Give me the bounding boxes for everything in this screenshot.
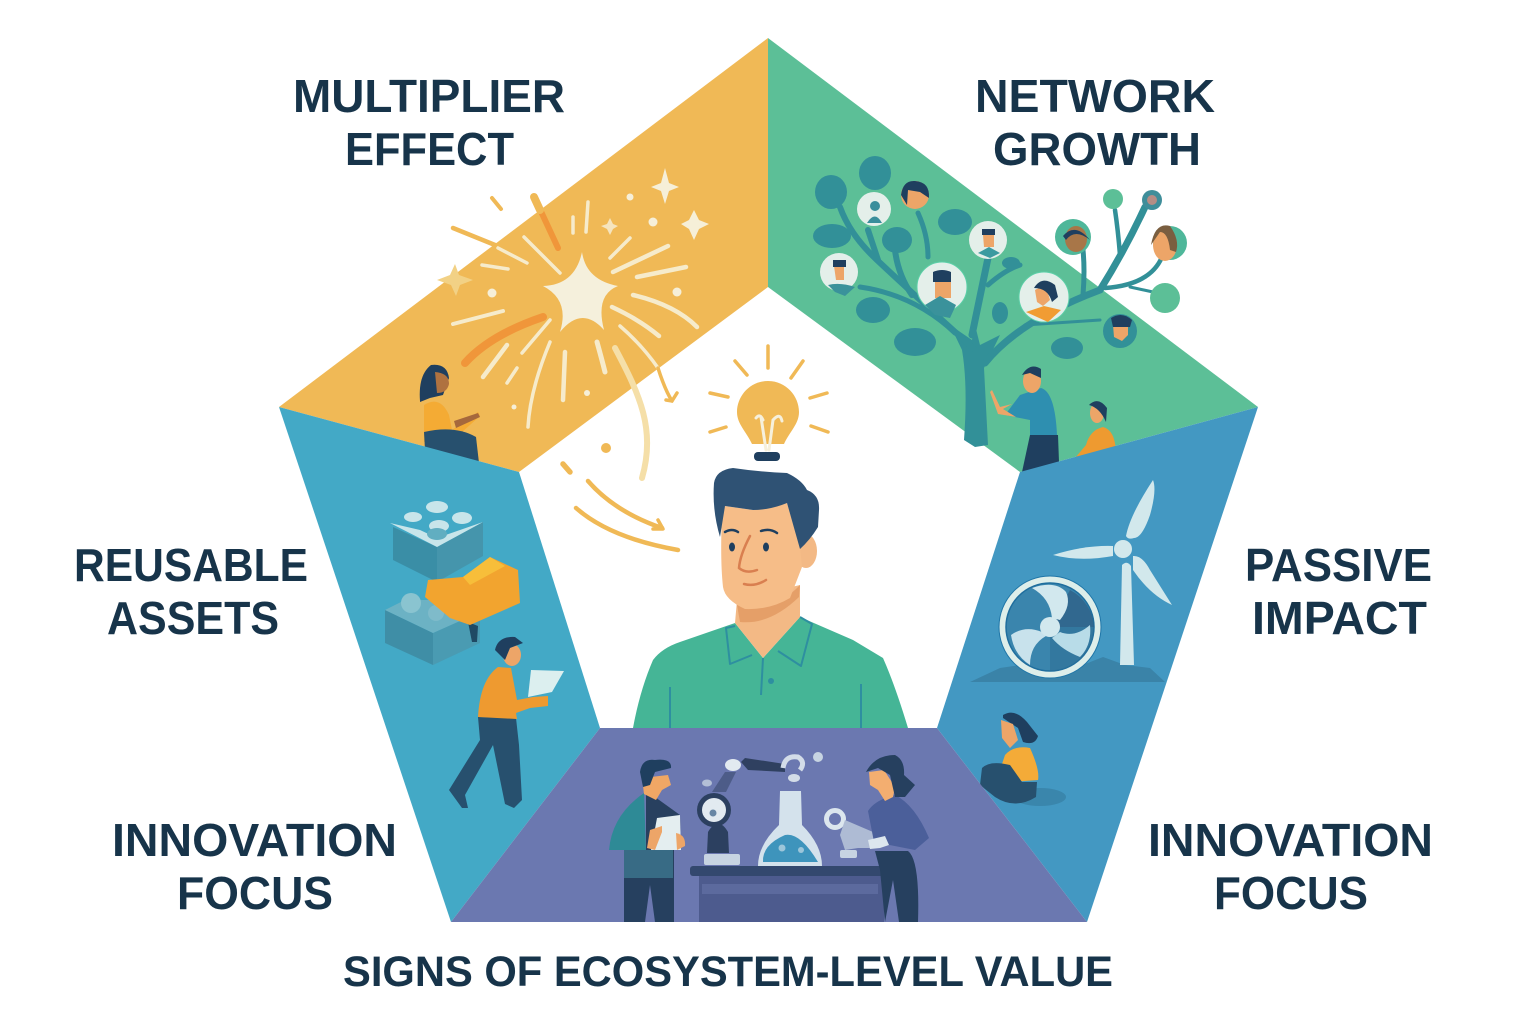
heading: reusable assets: ASSETS: [107, 592, 279, 644]
panel: multiplier effect: [279, 38, 768, 478]
icon: fireworks burst: [437, 168, 709, 478]
figure: man reading: [449, 637, 564, 808]
heading: multiplier effect: MULTIPLIER: [293, 70, 565, 122]
panel: network growth: [768, 38, 1258, 472]
icon: building blocks: [385, 501, 520, 665]
heading: innovation focus right: FOCUS: [1214, 867, 1368, 919]
nose and smile: [739, 536, 766, 585]
title: SIGNS OF ECOSYSTEM-LEVEL VALUE: [343, 948, 1113, 996]
heading: innovation focus right: INNOVATION: [1148, 814, 1433, 866]
panel: reusable assets teal: [279, 407, 600, 922]
heading: passive impact: PASSIVE: [1245, 539, 1432, 591]
heading: innovation focus left: INNOVATION: [112, 814, 397, 866]
heading: multiplier effect: EFFECT: [345, 123, 514, 175]
collar: [670, 617, 861, 728]
figure: man at tree: [990, 367, 1059, 472]
figure: woman at table: [866, 755, 929, 922]
icon: yellow swoosh arrows: [563, 443, 678, 550]
ear: [795, 534, 817, 568]
eyes and brows: [725, 530, 777, 552]
heading: passive impact: IMPACT: [1252, 592, 1427, 644]
heading: passive impact: [1245, 539, 1432, 644]
figure: child in orange: [1075, 401, 1116, 458]
icon: tree of people: [813, 156, 1187, 447]
panel: passive impact: [937, 407, 1258, 922]
portrait circles: [820, 181, 1187, 348]
heading: network growth: [975, 70, 1215, 175]
icon: fan: [999, 576, 1101, 678]
icon: flask: [758, 791, 822, 866]
man: central figure: [633, 468, 908, 728]
shirt: [633, 617, 908, 728]
icon: light bulb: [710, 346, 828, 461]
hair: [714, 468, 819, 549]
icon: robot arm: [697, 752, 880, 865]
figure: sitting woman: [980, 713, 1066, 806]
heading: network growth: GROWTH: [993, 123, 1201, 175]
heading: innovation focus left: [112, 814, 397, 919]
icon: lab table: [690, 866, 887, 922]
heading: network growth: NETWORK: [975, 70, 1215, 122]
face: [721, 503, 802, 609]
figure: seated woman: [420, 365, 480, 463]
figure: man with tablet: [609, 760, 685, 922]
heading: innovation focus right: [1148, 814, 1433, 919]
icon: wind turbine: [1053, 480, 1172, 665]
neck: [735, 585, 800, 658]
icon: hill base: [970, 657, 1165, 682]
panel: innovation purple: [451, 728, 1087, 922]
heading: reusable assets: [74, 539, 308, 644]
heading: innovation focus left: FOCUS: [177, 867, 333, 919]
heading: multiplier effect: [293, 70, 565, 175]
heading: reusable assets: REUSABLE: [74, 539, 308, 591]
